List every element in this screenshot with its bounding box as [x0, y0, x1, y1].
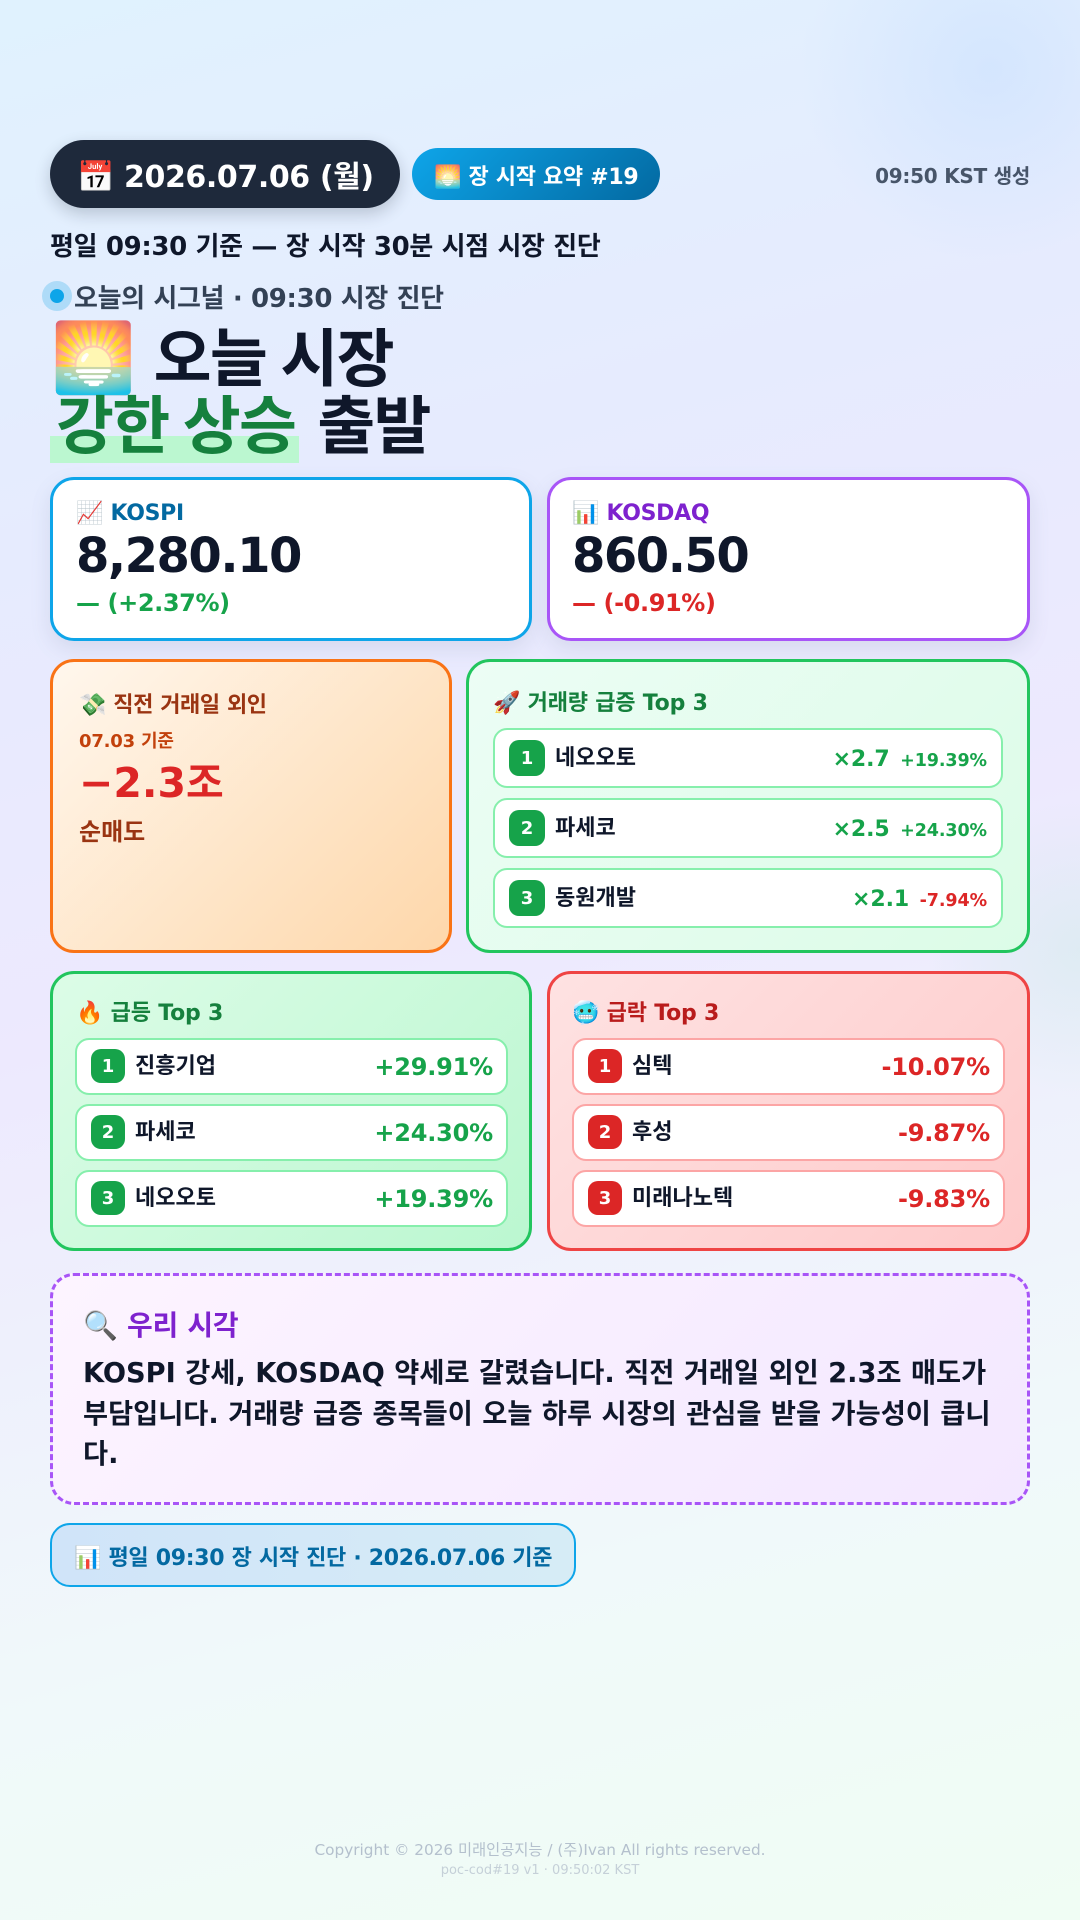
rank — [509, 810, 545, 846]
badge: market open summary — [412, 148, 660, 200]
signal label — [42, 281, 444, 314]
rank: 2 — [102, 1122, 114, 1142]
name: 파세코 — [555, 816, 616, 841]
name: 미래나노텍 — [632, 1186, 733, 1211]
date pill: 📅 2026.07.06 (월) — [77, 160, 374, 195]
value: -10.07% — [881, 1053, 990, 1081]
rank — [588, 1181, 622, 1215]
foreign title: 💸 직전 거래일 외인 — [79, 693, 267, 718]
rank: 1 — [521, 748, 533, 768]
panel: KOSDAQ — [547, 477, 1030, 641]
footer chip: 📊 평일 09:30 장 시작 진단 · 2026.07.06 기준 — [74, 1546, 552, 1571]
gainer row 2 — [75, 1104, 508, 1161]
rank — [509, 880, 545, 916]
name: 후성 — [632, 1120, 672, 1145]
panel: volume surge top 3 — [466, 659, 1030, 953]
name: 동원개발 — [555, 886, 636, 911]
name: 심텍 — [632, 1054, 672, 1079]
foreign date: 07.03 기준 — [79, 731, 174, 752]
build info: poc-cod#19 v1 · 09:50:02 KST — [441, 1863, 639, 1878]
name: 파세코 — [135, 1120, 196, 1145]
KOSPI change: — (+2.37%) — [76, 589, 230, 617]
value: -9.87% — [898, 1119, 990, 1147]
rank: 1 — [102, 1056, 114, 1076]
rank — [509, 740, 545, 776]
panel: our view callout — [50, 1273, 1030, 1505]
date pill — [50, 140, 400, 208]
name: 진흥기업 — [135, 1054, 216, 1079]
rank — [91, 1181, 125, 1215]
signal text: 오늘의 시그널 · 09:30 시장 진단 — [74, 284, 444, 314]
volume title: 🚀 거래량 급증 Top 3 — [493, 691, 708, 716]
rank: 2 — [599, 1122, 611, 1142]
foreign value: −2.3조 — [79, 759, 224, 807]
volume row 1 — [493, 728, 1003, 788]
rank — [91, 1115, 125, 1149]
value: +19.39% — [374, 1185, 493, 1213]
headline line 2: 강한 상승 출발 — [56, 390, 430, 463]
generated time: 09:50 KST 생성 — [875, 164, 1030, 188]
foreign net sell: 순매도 — [79, 818, 145, 846]
name: 네오오토 — [135, 1186, 216, 1211]
loser row 3 — [572, 1170, 1005, 1227]
loser row 2 — [572, 1104, 1005, 1161]
ratio and change: ×2.5 +24.30% — [833, 817, 987, 842]
rank: 1 — [599, 1056, 611, 1076]
name: 네오오토 — [555, 746, 636, 771]
badge: market open summary: 🌅 장 시작 요약 #19 — [434, 165, 638, 190]
loser row 1 — [572, 1038, 1005, 1095]
value: +29.91% — [374, 1053, 493, 1081]
ratio and change: ×2.7 +19.39% — [833, 747, 987, 772]
pulse dot — [50, 289, 64, 303]
value: +24.30% — [374, 1119, 493, 1147]
panel: losers top 3 — [547, 971, 1030, 1251]
ratio and change: ×2.1 -7.94% — [852, 887, 987, 912]
callout title: 🔍 우리 시각 — [83, 1309, 238, 1342]
rank: 3 — [599, 1188, 611, 1208]
volume row 2 — [493, 798, 1003, 858]
KOSDAQ label: 📊 KOSDAQ — [572, 501, 709, 526]
rank — [588, 1115, 622, 1149]
footer chip — [50, 1523, 576, 1587]
losers title: 🥶 급락 Top 3 — [572, 1001, 719, 1026]
volume row 3 — [493, 868, 1003, 928]
rank: 3 — [521, 888, 533, 908]
KOSPI label: 📈 KOSPI — [76, 501, 184, 526]
gainer row 3 — [75, 1170, 508, 1227]
gainer row 1 — [75, 1038, 508, 1095]
callout text: KOSPI 강세, KOSDAQ 약세로 갈렸습니다. 직전 거래일 외인 2.3조 매도가 부담입니다. 거래량 급증 종목들이 오늘 하루 시장의 관심을 받을 가능성이 큽니다. — [83, 1358, 990, 1470]
rank — [91, 1049, 125, 1083]
KOSPI value: 8,280.10 — [76, 528, 301, 584]
panel: gainers top 3 — [50, 971, 532, 1251]
rank: 3 — [102, 1188, 114, 1208]
headline line 1: 🌅 오늘 시장 — [51, 319, 393, 398]
value: -9.83% — [898, 1185, 990, 1213]
gainers title: 🔥 급등 Top 3 — [76, 1001, 223, 1026]
panel: KOSPI — [50, 477, 532, 641]
rank — [588, 1049, 622, 1083]
KOSDAQ value: 860.50 — [572, 528, 748, 584]
rank: 2 — [521, 818, 533, 838]
panel: foreign investors — [50, 659, 452, 953]
headline — [50, 319, 430, 463]
subtitle: 평일 09:30 기준 — 장 시작 30분 시점 시장 진단 — [50, 232, 600, 262]
copyright: Copyright © 2026 미래인공지능 / (주)Ivan All rights reserved. — [314, 1841, 766, 1859]
KOSDAQ change: — (-0.91%) — [572, 589, 716, 617]
